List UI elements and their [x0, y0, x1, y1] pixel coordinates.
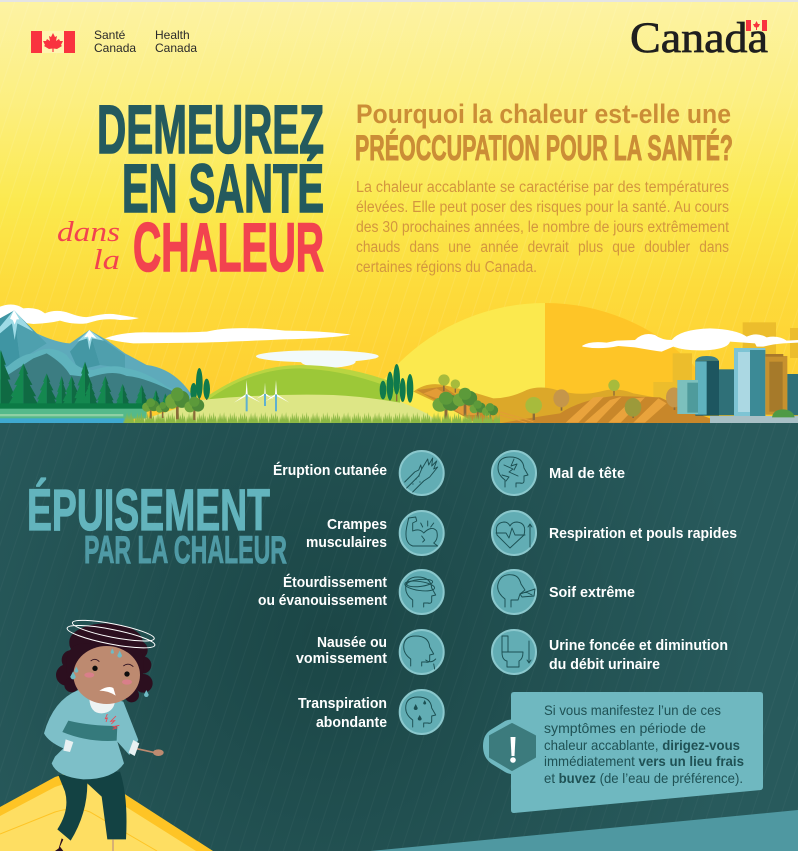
title: EN SANTÉ — [122, 150, 324, 227]
heading: heat exhaustion — [27, 478, 287, 572]
symptom labels, left column: Nausée ou — [317, 635, 387, 651]
icon: Canadian flag — [31, 31, 75, 53]
symptom labels, left column: vomissement — [296, 651, 387, 667]
symptom labels, left column: Éruption cutanée — [273, 462, 387, 479]
lower-right lighter band — [370, 810, 798, 851]
heading: heat exhaustion: PAR LA CHALEUR — [84, 529, 287, 572]
dizzy halos — [66, 616, 156, 652]
sweat drops — [70, 648, 149, 697]
header logos — [31, 28, 197, 55]
Santé Canada wordmark line 2: Canada — [94, 41, 136, 55]
callout text: Si vous manifestez l’un de ces — [544, 703, 721, 718]
icon: toilet, decreased urine — [492, 630, 536, 674]
icon: headache — [492, 451, 536, 495]
callout text: et buvez (de l’eau de préférence). — [544, 771, 743, 786]
pain marks — [105, 714, 119, 729]
icon: muscle cramp — [400, 511, 444, 555]
heading: why heat is a health concern — [355, 99, 733, 168]
Santé Canada wordmark: Santé — [94, 28, 126, 42]
symptom labels, left column: Transpiration — [298, 696, 387, 712]
symptom labels, left column — [258, 462, 387, 731]
heading: why heat is a health concern: Pourquoi la chaleur est-elle une — [356, 99, 731, 129]
intro paragraph: La chaleur accablante se caractérise par des températures — [356, 179, 729, 196]
hair — [56, 623, 153, 702]
title: la — [93, 244, 120, 276]
fields — [413, 384, 722, 423]
sun — [337, 303, 753, 511]
grass — [400, 410, 500, 423]
cloud right — [256, 350, 379, 368]
icon: extreme thirst — [492, 570, 536, 614]
landscape illustration — [0, 303, 798, 511]
callout text — [544, 703, 744, 786]
left landscape: mountains, forest, lake, hills — [0, 305, 400, 424]
icon: rapid heartbeat — [492, 511, 536, 555]
right landscape: fields, orchards, city — [400, 322, 798, 423]
callout box — [511, 692, 763, 813]
heading: heat exhaustion: ÉPUISEMENT — [27, 478, 270, 543]
symptom labels, left column: Étourdissement — [283, 574, 387, 591]
symptom labels, right column: Respiration et pouls rapides — [549, 526, 737, 542]
yellow floor — [0, 773, 213, 851]
symptom labels, right column — [549, 466, 737, 673]
grass — [123, 410, 400, 423]
Health Canada wordmark: Health — [155, 28, 190, 42]
title: CHALEUR — [133, 209, 324, 286]
icon: nausea head — [400, 630, 444, 674]
legs — [55, 772, 127, 851]
sweater — [44, 690, 138, 779]
city buildings — [677, 348, 798, 417]
callout: what to do — [483, 692, 763, 813]
icon: sweating head — [400, 690, 444, 734]
head — [73, 646, 140, 704]
symptom labels, right column: Urine foncée et diminution — [549, 638, 728, 654]
icon: warning hexagon — [483, 720, 540, 774]
icon: rash on hand — [400, 451, 444, 495]
cypress trees on hill — [190, 364, 400, 401]
symptom labels, left column: abondante — [316, 715, 387, 731]
round trees — [142, 387, 204, 420]
cloud over city — [582, 328, 798, 352]
faint skyline — [653, 322, 798, 402]
title: dans — [57, 216, 120, 248]
title: DEMEUREZ — [97, 91, 324, 168]
pine forest — [0, 350, 169, 407]
Canada logo: Canada — [630, 15, 768, 62]
pavement — [710, 416, 798, 423]
title — [57, 91, 324, 286]
icon: dizzy head — [400, 570, 444, 614]
callout text: immédiatement vers un lieu frais — [544, 754, 744, 769]
mountains — [0, 310, 191, 407]
collar — [89, 698, 115, 713]
face — [84, 659, 133, 696]
cloud behind mountain — [0, 305, 139, 324]
intro paragraph: certaines régions du Canada. — [356, 259, 537, 276]
hills — [123, 365, 400, 423]
orchard trees — [438, 374, 682, 420]
Health Canada wordmark line 2: Canada — [155, 41, 197, 55]
symptom labels, left column: musculaires — [306, 535, 387, 551]
intro paragraph: chauds dans une année devrait plus que doubler dans — [356, 239, 729, 256]
hill left green — [400, 402, 440, 423]
symptom labels, right column: Mal de tête — [549, 466, 625, 482]
sweater stripe — [62, 721, 117, 741]
callout text: chaleur accablante, dirigez-vous — [544, 738, 740, 753]
cloud centre — [105, 328, 351, 343]
wind turbines — [234, 380, 289, 411]
symptom labels, left column: Crampes — [327, 517, 387, 533]
yellow sky background — [0, 0, 798, 425]
intro paragraph: des 30 prochaines années, le nombre de jours extrêmement — [356, 219, 730, 236]
symptom labels, right column: Soif extrême — [549, 585, 635, 601]
hands — [72, 747, 164, 756]
round trees — [400, 374, 498, 422]
lake and shore — [0, 403, 147, 424]
intro paragraph — [356, 179, 730, 276]
callout text: symptômes en période de — [544, 721, 706, 736]
character: dizzy person — [44, 616, 164, 851]
sleeve cuffs — [63, 739, 139, 756]
symptom labels, right column: du débit urinaire — [549, 657, 660, 673]
dark teal lower panel — [0, 423, 798, 851]
symptom labels, left column: ou évanouissement — [258, 593, 387, 609]
intro paragraph: élevées. Elle peut poser des risques pour la santé. Au cours — [356, 199, 729, 216]
